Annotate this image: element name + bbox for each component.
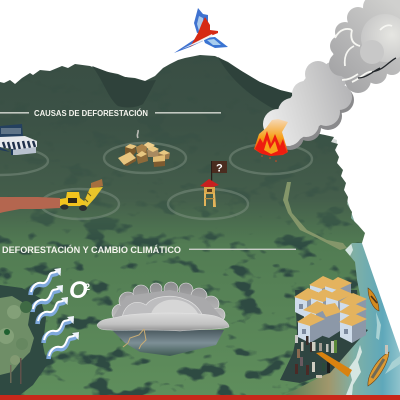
upper dark billow — [329, 0, 400, 93]
smoke plume — [263, 0, 400, 150]
icon: stacked wooden crates — [118, 130, 170, 167]
cloud base — [97, 313, 229, 331]
footer bar — [0, 395, 400, 400]
fire — [254, 119, 288, 162]
flag: ? — [216, 162, 223, 174]
tree canopy — [0, 296, 34, 384]
villagers — [295, 335, 337, 378]
village houses — [294, 276, 367, 343]
upper cloud — [112, 282, 225, 322]
storm cloud — [97, 282, 229, 356]
oxygen label: O — [69, 277, 88, 304]
sea foam — [344, 243, 362, 395]
icon: factory — [0, 124, 37, 155]
right mountain shade — [218, 57, 297, 115]
coast and sea — [270, 200, 400, 396]
section heading: deforestación y cambio climático: DEFORESTACIÓN Y CAMBIO CLIMÁTICO — [2, 244, 181, 255]
canoe top — [368, 288, 379, 311]
wooden dock — [316, 352, 352, 377]
icon: oxygen arrows — [30, 268, 79, 359]
river — [283, 182, 347, 250]
icon: scarlet macaw — [174, 8, 228, 53]
icon: watch tower with question flag — [200, 161, 227, 207]
dark forest hollow behind tree — [0, 285, 47, 395]
mountain valley shade — [92, 66, 156, 107]
lower grey smoke — [263, 61, 354, 150]
village shadow — [280, 290, 368, 383]
section heading: causas de deforestación: CAUSAS DE DEFORESTACIÓN — [34, 109, 148, 118]
rain shadow — [112, 330, 224, 356]
icon: bulldozer — [60, 179, 103, 211]
pale water streaks — [376, 312, 400, 374]
lightning — [123, 329, 146, 349]
cleared dirt road — [0, 197, 60, 213]
location rings — [0, 143, 312, 219]
forest canopy texture — [0, 60, 360, 395]
canoe with passengers — [368, 345, 389, 386]
oxygen label: 2 — [85, 282, 90, 292]
